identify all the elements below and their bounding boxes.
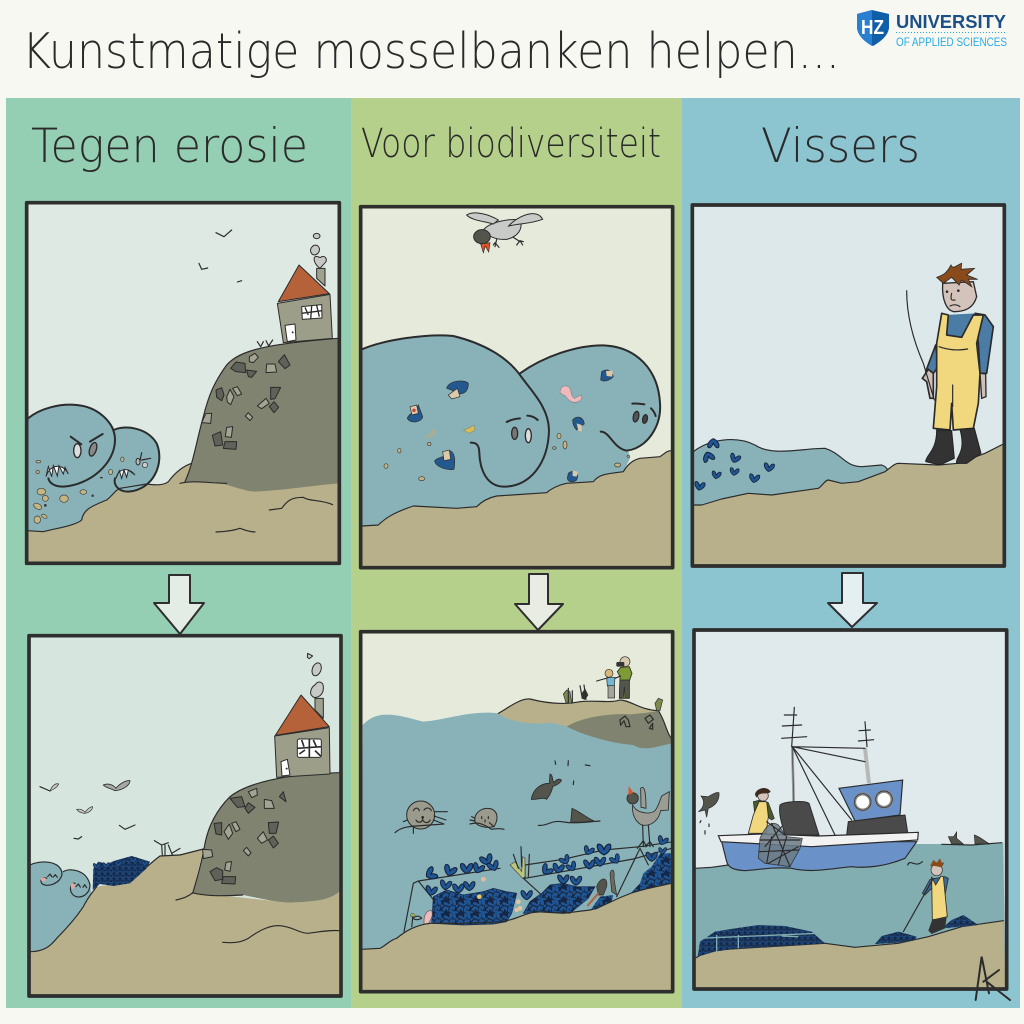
- sky: [361, 207, 673, 568]
- logo: HZ University of Applied Sciences: HZ: [861, 17, 884, 39]
- panel: erosion before: [27, 203, 339, 563]
- sky: [29, 636, 341, 996]
- mussels, worm and shells: [384, 370, 630, 482]
- mussel farmer with rake: [903, 858, 948, 934]
- frame: [694, 630, 1007, 989]
- people with binoculars: [597, 657, 632, 698]
- diving bird: [467, 213, 543, 253]
- ground outline: [30, 849, 339, 952]
- panel: erosion after: [29, 636, 341, 996]
- frame: [27, 203, 339, 563]
- wading birds: [154, 841, 180, 855]
- sand island: [498, 699, 665, 727]
- seabed outline: [695, 921, 1003, 958]
- panel: fishers after: [694, 630, 1010, 1000]
- small worm, sprout, anemones and seagrass: [411, 847, 617, 927]
- sky: [27, 203, 339, 563]
- panel: fishers before: [692, 205, 1004, 566]
- oystercatcher on bank: [627, 786, 669, 848]
- arrow: fishers: [828, 573, 877, 627]
- sand ground: [28, 463, 338, 562]
- column: Vissers background: [682, 98, 1020, 1008]
- sand ripple lines: [216, 497, 333, 532]
- sand seabed: [695, 921, 1006, 987]
- arrow: erosion: [154, 575, 204, 634]
- artificial reef structure with mussels: [404, 835, 673, 932]
- distant seal and fin: [942, 832, 1002, 845]
- plants on island: [563, 685, 663, 711]
- mussel banks: [698, 915, 978, 957]
- hull: [722, 842, 917, 871]
- frame: [361, 632, 673, 992]
- frame: [361, 207, 673, 568]
- sea: [362, 713, 671, 953]
- panel: biodiversity before: [361, 207, 673, 568]
- water: [693, 440, 887, 505]
- seabed outline: [362, 883, 671, 949]
- sad faces: [512, 427, 518, 439]
- arrow: biodiversity: [515, 574, 563, 630]
- birds: [199, 230, 242, 282]
- eyes and brows: [74, 444, 81, 458]
- house with chimney smoke: [275, 653, 330, 777]
- sky: [692, 205, 1004, 566]
- submerged rock: [567, 711, 671, 748]
- sky: [694, 630, 1007, 989]
- column: Tegen erosie background: [6, 98, 351, 1008]
- masts and rigging: [782, 707, 874, 835]
- rock cliff: [180, 338, 338, 492]
- logo: HZ University of Applied Sciences: UNIVERSITY: [896, 12, 1006, 32]
- net: [758, 823, 802, 867]
- house with chimney smoke: [257, 233, 332, 347]
- sky: [361, 632, 673, 992]
- sea: [695, 843, 1005, 963]
- sand ground: [362, 451, 671, 567]
- seal fin: [538, 808, 600, 825]
- frame: [692, 205, 1004, 566]
- sand ground: [693, 444, 1003, 565]
- rock cliff: [193, 773, 339, 903]
- heading: Tegen erosie: Tegen erosie: [31, 119, 308, 174]
- seal two: [470, 808, 504, 829]
- island outline and stones: [498, 699, 671, 738]
- column: Voor biodiversiteit background: [351, 98, 682, 1008]
- debris: [37, 488, 46, 495]
- mussel bank: [93, 856, 150, 890]
- logo: HZ University of Applied Sciences: [857, 10, 1007, 49]
- sea surface lines: [695, 862, 922, 868]
- heading: Vissers: Vissers: [761, 119, 920, 174]
- title: Kunstmatige mosselbanken helpen...: [22, 23, 840, 80]
- deckhand: [748, 788, 774, 833]
- shoreline: [693, 444, 1003, 505]
- signature: [976, 957, 1010, 1000]
- frame: [29, 636, 341, 996]
- teeth: [46, 466, 68, 477]
- disappointed fisher: [907, 263, 993, 465]
- fishing boat: [718, 707, 918, 871]
- water monsters: [362, 335, 671, 526]
- angry water monsters: [28, 405, 192, 532]
- few mussels: [694, 439, 775, 491]
- sand seabed: [362, 883, 671, 991]
- heading: Voor biodiversiteit: Voor biodiversiteit: [361, 121, 661, 167]
- panel: biodiversity after: [361, 632, 673, 992]
- jumping fish and splashes: [531, 761, 590, 799]
- gulls: [40, 781, 135, 839]
- seal smiling: [395, 801, 447, 833]
- sand with artificial bank slope: [30, 849, 339, 995]
- jumping seal: [698, 792, 719, 834]
- calm water waves: [30, 862, 92, 952]
